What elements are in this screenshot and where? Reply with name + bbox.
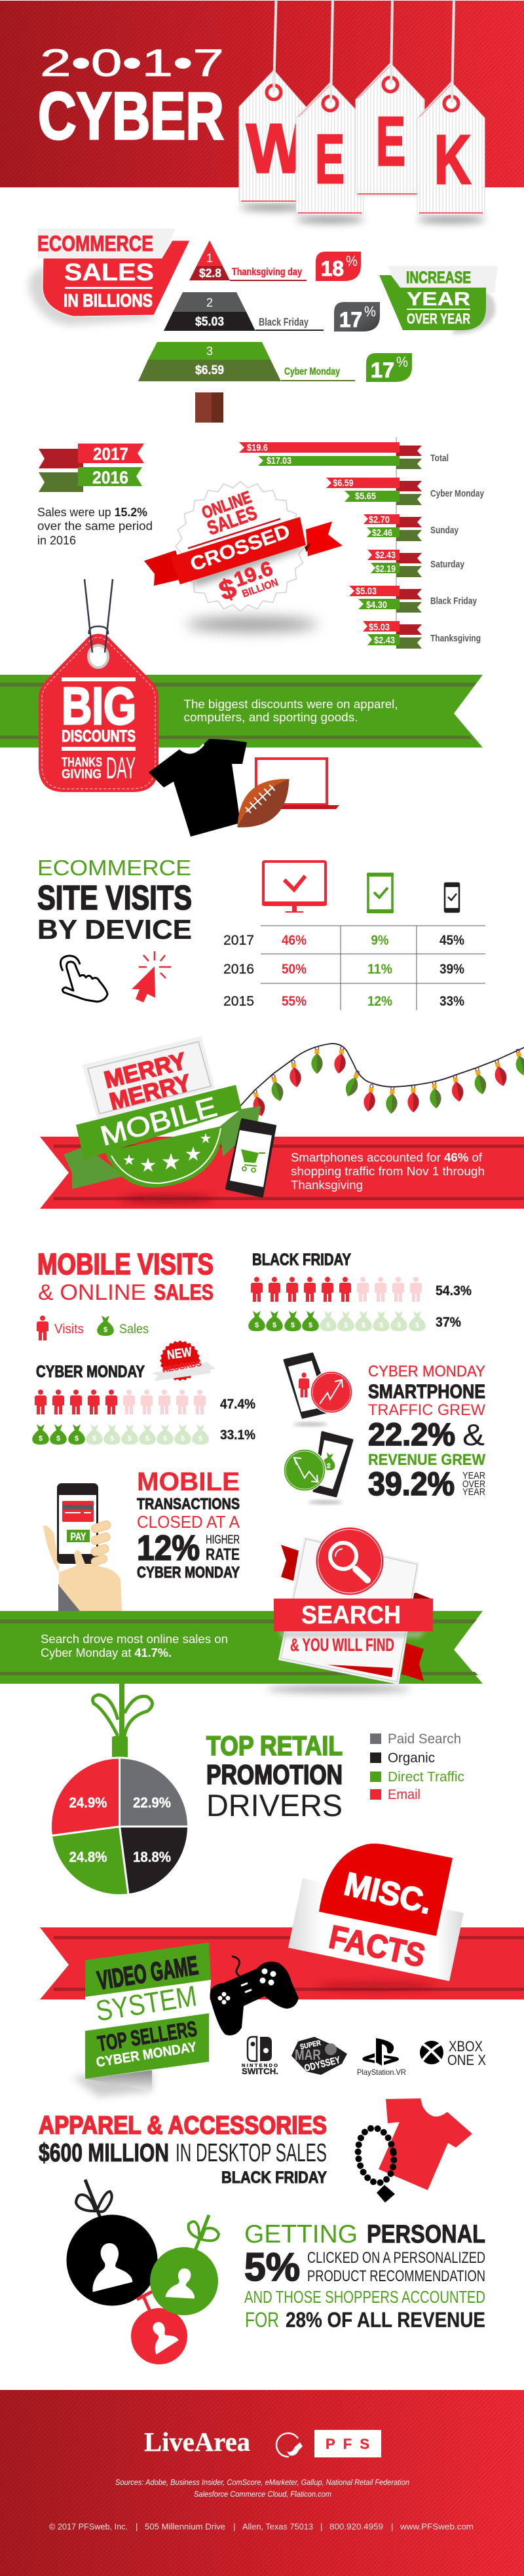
legend: visits and sales — [37, 1316, 149, 1340]
pictogram: black friday sales: $ — [309, 1321, 312, 1329]
pictogram: cyber monday visits — [35, 1390, 255, 1414]
row: thanksgiving — [363, 621, 481, 649]
card: video game system top sellers: CYBER MONDAY — [95, 2039, 198, 2070]
starburst badge: online sales crossed $19.6 billion: 19.6 — [231, 557, 276, 592]
pictogram: black friday sales: 37% — [436, 1315, 461, 1330]
row: total: Total — [430, 453, 449, 464]
text: sales were up — [37, 506, 153, 547]
icon: tablet — [367, 873, 394, 913]
text: getting personal: PERSONAL — [367, 2220, 485, 2248]
logo: nintendo switch: NINTENDO — [242, 2062, 278, 2068]
text: apparel and accessories: BLACK FRIDAY — [221, 2169, 327, 2187]
price tag: big discounts thanksgiving day: BIG — [62, 677, 136, 735]
legend: visits and sales: $ — [103, 1326, 107, 1334]
pie chart ornament: top retail promotion drivers — [51, 1684, 189, 1895]
pictogram: cyber monday sales: $ — [56, 1435, 60, 1443]
pictogram: black friday sales: $ — [379, 1321, 383, 1329]
badge: merry merry mobile: MERRY — [102, 1047, 189, 1093]
icon: phone with shopping cart — [227, 1120, 275, 1196]
header band — [0, 1, 524, 187]
banner: ecommerce sales in billions: SALES — [64, 259, 154, 286]
row 2015: 2015 — [223, 994, 254, 1009]
logo: super mario odyssey: ODYSSEY — [303, 2055, 341, 2074]
starburst badge: online sales crossed $19.6 billion: CROSSED — [187, 520, 293, 576]
pictogram: black friday sales: $ — [272, 1321, 276, 1329]
text: mobile transactions closed at 12% higher rate: TRANSACTIONS — [137, 1495, 240, 1513]
price tag: big discounts thanksgiving day — [39, 579, 159, 792]
green banner: search drove online sales: Search drove most online sales on — [41, 1633, 228, 1646]
heading: top retail promotion drivers: PROMOTION — [206, 1759, 343, 1790]
footer contact line — [49, 2522, 474, 2531]
footer band — [0, 2390, 524, 2576]
pictogram: black friday visits: 54.3% — [436, 1283, 472, 1298]
text: mobile transactions closed at 12% higher rate: RATE — [206, 1545, 240, 1564]
tag E — [296, 0, 364, 215]
green banner: biggest discounts: computers, and sporting goods. — [183, 710, 358, 724]
red banner: smartphones accounted: Smartphones accounted for 46% of — [291, 1151, 483, 1164]
pictogram: black friday sales: $ — [362, 1321, 365, 1329]
icon: black ornament — [67, 2180, 157, 2306]
tree trunk — [195, 392, 223, 423]
bar chart: cyber week sales 2017 vs 2016 — [239, 437, 485, 649]
pictogram: black friday visits — [251, 1277, 472, 1302]
row: black friday: $5.03 — [356, 586, 377, 597]
logo: LiveArea: LiveArea — [144, 2427, 250, 2457]
logo: super mario odyssey — [291, 2037, 347, 2075]
illustration: hand holding phone with pay screen — [43, 1483, 122, 1611]
logo: xbox one x: ONE X — [447, 2052, 486, 2068]
price tag: big discounts thanksgiving day: THANKS — [62, 755, 102, 770]
row: saturday — [367, 550, 465, 577]
icon: red ornament — [131, 2292, 187, 2364]
row 2017 — [223, 933, 464, 948]
badge: 17%: % — [364, 303, 376, 320]
text: getting personal: GETTING — [244, 2220, 358, 2248]
badge: merry merry mobile — [64, 1038, 261, 1202]
text: cyber monday smartphone traffic and revenue: & — [462, 1418, 485, 1452]
text: sales were up: in 2016 — [37, 534, 76, 547]
text: getting personal: 5% — [244, 2245, 300, 2289]
text: mobile transactions closed at 12% higher rate: CYBER MONDAY — [137, 1564, 240, 1582]
legend: visits and sales: Visits — [54, 1322, 84, 1336]
text: cyber monday smartphone traffic and revenue: 39.2% — [368, 1466, 455, 1502]
tag W: W — [246, 110, 305, 187]
badge: 17% — [334, 302, 380, 331]
text: cyber monday smartphone traffic and revenue: YEAR — [462, 1487, 485, 1498]
text: apparel and accessories — [39, 2112, 327, 2187]
row: black friday — [349, 586, 477, 613]
tag K — [417, 0, 485, 215]
tree tier 3: Cyber Monday: $6.59 — [195, 364, 224, 377]
row 2015: 12% — [367, 994, 392, 1009]
tree tier 1: Thanksgiving day — [189, 240, 307, 281]
card: video game system top sellers: TOP SELLERS — [96, 2016, 198, 2056]
text: cyber monday smartphone traffic and revenue: SMARTPHONE — [368, 1381, 485, 1403]
banner: ecommerce sales in billions: ECOMMERCE — [37, 231, 153, 256]
starburst badge: online sales crossed $19.6 billion: $ — [215, 572, 240, 606]
icon: bead necklace — [354, 2126, 398, 2203]
icon: desktop monitor — [262, 862, 327, 913]
pictogram: cyber monday sales — [32, 1424, 255, 1445]
tree tier 3: Cyber Monday: 3 — [206, 345, 213, 358]
logo: playstation vr: PlayStation.VR — [357, 2068, 406, 2077]
legend: promotion drivers: Paid Search — [388, 1732, 461, 1747]
pictogram: cyber monday sales: $ — [39, 1435, 43, 1443]
text: apparel and accessories: IN DESKTOP SALES — [176, 2139, 327, 2167]
pictogram: black friday sales: $ — [291, 1321, 295, 1329]
ribbon: 2016: 2016 — [92, 468, 128, 487]
row: black friday: $4.30 — [366, 599, 387, 611]
text: mobile transactions closed at 12% higher rate: CLOSED AT A — [137, 1512, 240, 1532]
heading: ecommerce site visits by device: SITE VISITS — [37, 879, 192, 917]
green banner: biggest discounts — [0, 675, 483, 748]
heading: ecommerce site visits by device — [37, 856, 192, 945]
text: cyber monday smartphone traffic and revenue: CYBER MONDAY — [368, 1363, 485, 1380]
row: cyber monday: $6.59 — [333, 478, 354, 489]
pictogram: black friday sales — [248, 1311, 461, 1331]
tree tier 2: Black Friday: $5.03 — [195, 315, 224, 329]
pictogram: black friday sales: $ — [415, 1321, 419, 1329]
row: cyber monday: $5.65 — [355, 491, 376, 502]
tag E second: E — [376, 103, 405, 180]
pictogram: cyber monday sales: $ — [75, 1435, 79, 1443]
ribbon: 2016 — [39, 467, 142, 492]
row: thanksgiving: $2.43 — [374, 635, 395, 646]
string of christmas lights — [240, 1044, 524, 1118]
pictogram: cyber monday visits: 47.4% — [220, 1397, 255, 1412]
row 2017: 45% — [440, 933, 464, 948]
pictogram: cyber monday sales: $ — [92, 1435, 96, 1443]
row 2016: 50% — [282, 962, 307, 977]
row: saturday: $2.43 — [375, 550, 396, 561]
badge: misc facts: MISC. — [341, 1865, 436, 1921]
tree tier 2: Black Friday: Black Friday — [259, 316, 309, 328]
heading: ecommerce site visits by device: ECOMMERCE — [37, 856, 191, 880]
text: getting personal — [244, 2220, 485, 2332]
pictogram: black friday sales: $ — [344, 1321, 348, 1329]
tag K: K — [434, 121, 471, 199]
row 2017: 9% — [371, 933, 389, 948]
heading: mobile visits and online sales: & ONLINE — [38, 1280, 146, 1305]
icon: pointing hand — [60, 956, 107, 1002]
banner: increase year over year: YEAR — [407, 289, 470, 310]
heading: top retail promotion drivers: TOP RETAIL — [206, 1730, 343, 1761]
pictogram: cyber monday sales: $ — [163, 1435, 167, 1443]
text: mobile transactions closed at 12% higher rate — [137, 1468, 240, 1582]
banner: increase year over year: INCREASE — [406, 269, 471, 287]
starburst badge: online sales crossed $19.6 billion — [144, 482, 343, 632]
text: getting personal: FOR — [245, 2308, 279, 2332]
icon: smartphone — [444, 882, 460, 913]
row 2016 — [223, 962, 464, 977]
text: cyber monday smartphone traffic and revenue: YEAR — [462, 1470, 485, 1481]
badge: misc facts: FACTS — [326, 1918, 428, 1975]
footer contact line: www.PFSweb.com — [400, 2522, 474, 2531]
footer contact line: | — [391, 2522, 393, 2531]
illustration: hand holding phone with pay screen: PAY — [71, 1530, 86, 1543]
row: sunday: Sunday — [430, 525, 459, 536]
hanging tags: WEEK — [239, 0, 485, 223]
icon: game controller — [210, 1956, 299, 2036]
pie chart ornament: top retail promotion drivers: 18.8% — [133, 1849, 171, 1865]
row: thanksgiving: $5.03 — [369, 622, 390, 633]
heading: top retail promotion drivers: DRIVERS — [206, 1788, 343, 1823]
row 2017: 46% — [282, 933, 307, 948]
row: sunday: $2.46 — [372, 527, 392, 539]
tree tier 2: Black Friday — [164, 292, 324, 331]
icon: red t-shirt — [379, 2098, 472, 2190]
row: sunday — [364, 514, 459, 541]
table: visits by device — [223, 926, 485, 1010]
badge: 18% — [316, 252, 361, 281]
price tag: big discounts thanksgiving day: DAY — [106, 751, 136, 785]
text: cyber monday smartphone traffic and revenue — [368, 1363, 485, 1502]
pictogram: cyber monday sales: $ — [181, 1435, 185, 1443]
badge: 18%: % — [346, 253, 358, 269]
footer contact line: Allen, Texas 75013 — [242, 2522, 313, 2531]
icon: phone with revenue growth: $ — [326, 1462, 331, 1470]
sources: Salesforce Commerce Cloud, Flaticon.com — [194, 2491, 331, 2499]
badge: new records: RECORDS — [162, 1359, 202, 1374]
sources: Sources: Adobe, Business Insider, ComScore, eMarketer, Gallup, National Retail Federation — [115, 2479, 409, 2487]
logo: nintendo switch — [242, 2037, 278, 2076]
pictogram: cyber monday sales: $ — [110, 1435, 114, 1443]
starburst badge: online sales crossed $19.6 billion: ONLINE — [199, 487, 254, 523]
logo: playstation vr — [357, 2038, 406, 2077]
tree tier 2: Black Friday: 2 — [206, 296, 213, 309]
logo: super mario odyssey: MAR — [295, 2047, 321, 2063]
title: 2017 Cyber: 2•0•1•7 — [40, 42, 224, 85]
heading: ecommerce site visits by device: BY DEVICE — [37, 914, 192, 945]
tag E second — [356, 0, 424, 196]
heading: cyber monday: CYBER MONDAY — [36, 1363, 145, 1381]
badge: merry merry mobile: MERRY — [107, 1069, 193, 1115]
icon: phone with revenue growth — [284, 1432, 352, 1504]
card: video game system top sellers — [72, 1942, 211, 2096]
text: sales were up: over the same period — [37, 520, 153, 533]
row 2016: 39% — [440, 962, 464, 977]
badge: misc facts — [288, 1844, 464, 1990]
badge: search and you will find: & YOU WILL FIND — [290, 1635, 394, 1655]
row: sunday: $2.70 — [369, 514, 390, 525]
tag E: E — [315, 121, 345, 198]
logo: nintendo switch: SWITCH. — [242, 2066, 278, 2076]
red banner: smartphones accounted: shopping traffic from Nov 1 through — [291, 1165, 485, 1178]
pie chart ornament: top retail promotion drivers: 24.9% — [69, 1794, 107, 1811]
footer contact line: 800.920.4959 — [329, 2522, 383, 2531]
badge: 17% green — [366, 353, 412, 382]
row 2016: 2016 — [223, 962, 254, 977]
footer contact line: | — [320, 2522, 322, 2531]
pie chart ornament: top retail promotion drivers: 22.9% — [133, 1794, 171, 1811]
heading: black friday: BLACK FRIDAY — [252, 1251, 351, 1269]
heading: top retail promotion drivers — [206, 1730, 343, 1823]
title: 2017 Cyber: CYBER — [38, 79, 224, 153]
footer contact line: 505 Millennium Drive — [145, 2522, 225, 2531]
green banner: search drove online sales — [0, 1611, 483, 1692]
green banner: search drove online sales: Cyber Monday at 41.7%. — [41, 1646, 172, 1659]
logo: xbox one x: XBOX — [449, 2038, 483, 2055]
text: sales were up: Sales were up 15.2% — [37, 506, 147, 519]
tag W — [239, 0, 306, 203]
row: cyber monday — [326, 478, 485, 505]
pictogram: black friday sales: $ — [397, 1321, 401, 1329]
pictogram: cyber monday sales: $ — [128, 1435, 132, 1443]
red banner: smartphones accounted — [40, 1137, 524, 1209]
row: total — [239, 442, 449, 469]
badge: new records: NEW — [166, 1345, 193, 1363]
icon: laptop — [256, 759, 339, 809]
sources — [115, 2479, 409, 2499]
text: mobile transactions closed at 12% higher rate: HIGHER — [206, 1533, 240, 1546]
heading: mobile visits and online sales: SALES — [154, 1280, 214, 1305]
row: black friday: Black Friday — [430, 596, 477, 607]
pictogram: black friday sales: $ — [326, 1321, 330, 1329]
row 2015: 55% — [282, 994, 307, 1009]
banner: increase year over year — [379, 266, 498, 334]
logo: gecko — [276, 2433, 303, 2457]
text: apparel and accessories: APPAREL & ACCESSORIES — [39, 2112, 327, 2140]
row: saturday: $2.19 — [375, 563, 396, 575]
badge: 17% green: 17 — [371, 358, 394, 382]
starburst badge: online sales crossed $19.6 billion: SALES — [204, 502, 260, 540]
banner: increase year over year: OVER YEAR — [407, 311, 470, 327]
tree tier 3: Cyber Monday: Cyber Monday — [284, 366, 340, 377]
starburst badge: online sales crossed $19.6 billion: BILLION — [241, 577, 280, 600]
text: cyber monday smartphone traffic and revenue: TRAFFIC GREW — [368, 1401, 485, 1419]
tree tier 1: Thanksgiving day: Thanksgiving day — [232, 267, 302, 278]
icon: t-shirt — [149, 739, 247, 837]
banner: ecommerce sales in billions — [29, 229, 190, 326]
heading: mobile visits and online sales: MOBILE VISITS — [37, 1247, 214, 1281]
ribbon: 2017 — [39, 444, 144, 468]
footer contact line: | — [233, 2522, 235, 2531]
red banner: smartphones accounted: Thanksgiving — [291, 1179, 363, 1192]
green banner: biggest discounts: The biggest discounts were on apparel, — [183, 697, 398, 711]
row 2017: 2017 — [223, 933, 254, 948]
legend: promotion drivers: Organic — [388, 1751, 435, 1766]
heading: mobile visits and online sales — [37, 1247, 214, 1305]
text: cyber monday smartphone traffic and revenue: REVENUE GREW — [368, 1451, 485, 1469]
price tag: big discounts thanksgiving day: GIVING — [62, 767, 102, 782]
text: cyber monday smartphone traffic and revenue: 22.2% — [368, 1418, 455, 1452]
pictogram: cyber monday sales: $ — [198, 1435, 202, 1443]
row: cyber monday: Cyber Monday — [430, 488, 485, 499]
card: video game system top sellers: VIDEO GAME — [96, 1951, 200, 1996]
logo: PFS — [314, 2430, 381, 2457]
badge: search and you will find — [274, 1528, 433, 1684]
tree tier 1: Thanksgiving day: $2.8 — [199, 267, 221, 280]
red banner: misc facts background — [40, 1927, 524, 1999]
text: mobile transactions closed at 12% higher rate: MOBILE — [137, 1468, 240, 1496]
icon: red cursor — [132, 951, 171, 1002]
legend: visits and sales: Sales — [119, 1322, 149, 1336]
row: total: $19.6 — [247, 442, 268, 453]
row: thanksgiving: Thanksgiving — [430, 633, 481, 644]
ribbon: 2017: 2017 — [93, 444, 128, 464]
badge: 17%: 17 — [339, 308, 362, 331]
pictogram: cyber monday sales: $ — [145, 1435, 149, 1443]
row 2015 — [223, 994, 464, 1009]
row: total: $17.03 — [267, 455, 291, 466]
logo: super mario odyssey: SUPER — [299, 2039, 322, 2051]
tree tier 3: Cyber Monday — [138, 342, 355, 381]
logo: xbox one x — [420, 2038, 486, 2068]
badge: new records — [152, 1340, 215, 1382]
badge: 18%: 18 — [321, 257, 344, 280]
icon: phone with traffic growth — [284, 1354, 352, 1426]
text: apparel and accessories: $600 MILLION — [39, 2139, 169, 2167]
footer contact line: © 2017 PFSweb, Inc. — [49, 2522, 128, 2531]
row: saturday: Saturday — [430, 559, 465, 570]
badge: search and you will find: SEARCH — [301, 1601, 401, 1629]
row 2015: 33% — [440, 994, 464, 1009]
pie chart ornament: top retail promotion drivers: 24.8% — [69, 1849, 107, 1865]
text: cyber monday smartphone traffic and revenue: OVER — [462, 1479, 485, 1490]
icon: green ornament — [150, 2215, 219, 2315]
tree tier 1: Thanksgiving day: 1 — [206, 252, 213, 265]
legend: promotion drivers — [370, 1732, 464, 1802]
price tag: big discounts thanksgiving day: DISCOUNTS — [62, 727, 136, 746]
pictogram: cyber monday sales: 33.1% — [220, 1428, 255, 1443]
legend: promotion drivers: Email — [388, 1787, 421, 1802]
badge: 17% green: % — [396, 354, 408, 370]
text: getting personal: 28% OF ALL REVENUE — [286, 2308, 485, 2332]
footer contact line: | — [136, 2522, 138, 2531]
card: video game system top sellers: SYSTEM — [94, 1980, 199, 2028]
badge: merry merry mobile: MOBILE — [97, 1091, 220, 1152]
pictogram: black friday sales: $ — [255, 1321, 259, 1329]
title: 2017 Cyber — [38, 42, 224, 153]
logo: PFS: PFS — [326, 2436, 369, 2452]
banner: ecommerce sales in billions: IN BILLIONS — [64, 290, 153, 311]
icon: football — [225, 766, 301, 841]
legend: promotion drivers: Direct Traffic — [388, 1770, 464, 1785]
text: mobile transactions closed at 12% higher rate: 12% — [137, 1528, 200, 1568]
row 2016: 11% — [367, 962, 392, 977]
